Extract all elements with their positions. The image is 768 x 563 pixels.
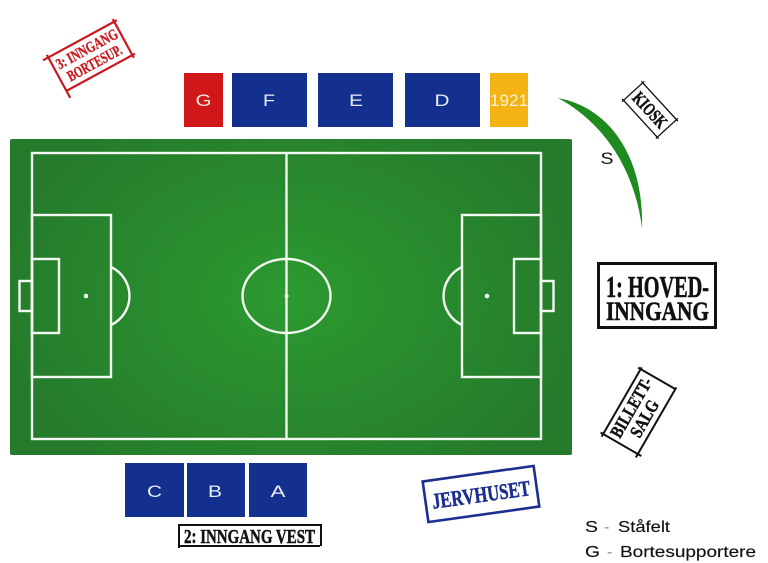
stand F: F bbox=[263, 91, 275, 110]
stamp: 3 inngang bortesup: BORTESUP. bbox=[64, 42, 125, 85]
stand B bbox=[187, 463, 245, 517]
right penalty area bbox=[462, 215, 541, 377]
stand C bbox=[125, 463, 184, 517]
stand A bbox=[249, 463, 307, 517]
stamp: billettsalg bbox=[599, 366, 680, 460]
legend entry G: Bortesupportere bbox=[620, 544, 756, 561]
right penalty spot bbox=[485, 294, 489, 298]
left penalty arc bbox=[111, 267, 129, 325]
left goal bbox=[20, 281, 32, 311]
stamp: 1 hovedinngang: 1: HOVED- bbox=[606, 269, 709, 304]
standing terrace arc bbox=[558, 98, 642, 228]
stand E: E bbox=[349, 91, 363, 110]
stand F bbox=[232, 73, 307, 127]
pitch outline bbox=[32, 153, 541, 439]
stamp: kiosk bbox=[621, 80, 679, 140]
stand D: D bbox=[434, 91, 450, 110]
legend entry S: - bbox=[604, 519, 609, 536]
legend entry S: Ståfelt bbox=[618, 518, 671, 536]
legend entry G: - bbox=[607, 544, 612, 561]
stand 1921: 1921 bbox=[490, 91, 528, 110]
stamp: billettsalg: SALG bbox=[626, 396, 663, 441]
stamp: kiosk: KIOSK bbox=[628, 88, 672, 132]
stamp: jervhuset: JERVHUSET bbox=[430, 475, 532, 514]
left penalty spot bbox=[84, 294, 88, 298]
panel: football pitch bbox=[10, 139, 572, 455]
stamp: 1 hovedinngang bbox=[598, 264, 716, 328]
right goal area bbox=[514, 259, 541, 333]
stand G: G bbox=[196, 91, 212, 110]
stamp: 3 inngang bortesup bbox=[42, 18, 139, 101]
stamp: 1 hovedinngang: INNGANG bbox=[606, 297, 709, 326]
halfway line bbox=[285, 153, 288, 439]
stand 1921 bbox=[490, 73, 528, 127]
legend entry G bbox=[585, 544, 756, 561]
stand D bbox=[405, 73, 480, 127]
left penalty area bbox=[32, 215, 111, 377]
stand C: C bbox=[147, 482, 162, 501]
stamp: billettsalg: BILLETT- bbox=[606, 374, 656, 441]
stamp: 3 inngang bortesup: 3: INNGANG bbox=[53, 26, 121, 73]
centre circle bbox=[242, 259, 330, 333]
centre spot bbox=[284, 294, 288, 298]
stamp: jervhuset bbox=[423, 466, 539, 522]
right goal bbox=[541, 281, 554, 311]
legend entry S: S bbox=[585, 519, 598, 536]
stand A: A bbox=[270, 482, 286, 501]
legend bbox=[585, 518, 756, 561]
legend entry G: G bbox=[585, 544, 600, 561]
terrace label S: S bbox=[600, 149, 614, 168]
stand G bbox=[184, 73, 223, 127]
stand E bbox=[318, 73, 393, 127]
stamp: 2 inngang vest: 2: INNGANG VEST bbox=[184, 526, 315, 548]
stand B: B bbox=[208, 482, 222, 501]
left goal area bbox=[32, 259, 59, 333]
legend entry S bbox=[585, 518, 671, 536]
right penalty arc bbox=[444, 267, 462, 325]
